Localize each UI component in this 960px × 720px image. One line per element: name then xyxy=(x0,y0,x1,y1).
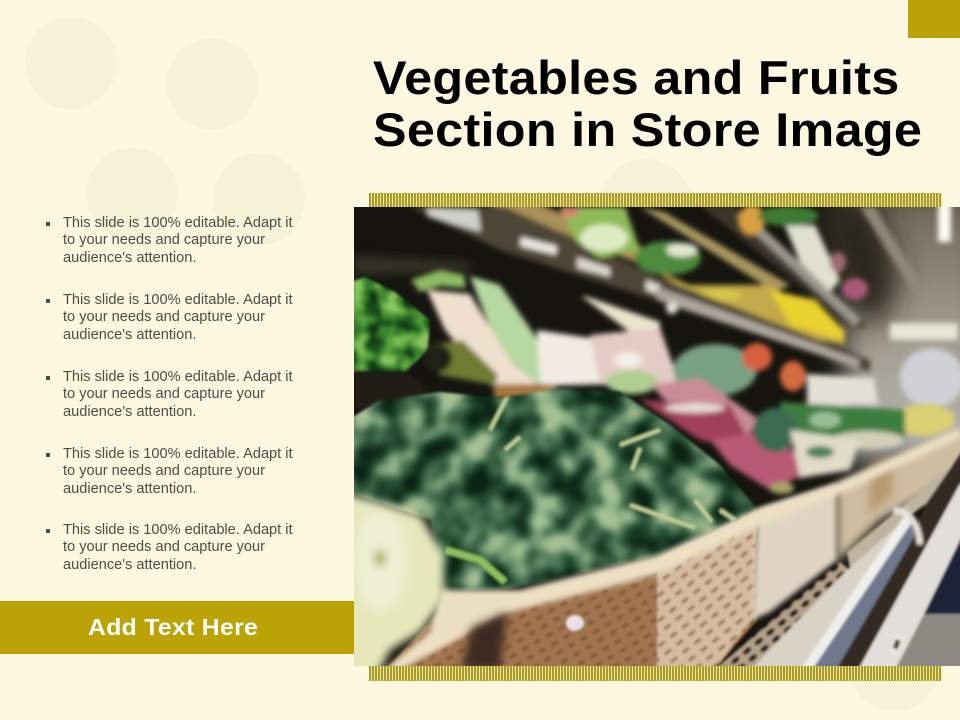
photo backdrop xyxy=(354,190,960,666)
background circle 1 xyxy=(25,17,117,109)
bullet 5: audience's attention. xyxy=(63,556,196,572)
background circle 5 xyxy=(600,159,692,251)
right blurred store background xyxy=(860,200,960,408)
pale lettuce foreground xyxy=(330,490,444,690)
shelf rail and lower fixtures xyxy=(714,440,960,670)
background circle 3 xyxy=(86,148,178,240)
bullet 3: to your needs and capture your xyxy=(63,386,265,402)
lettuce on left xyxy=(354,276,432,374)
bullet 3: audience's attention. xyxy=(63,404,196,420)
banner: add text here xyxy=(0,601,354,654)
bullet 5 xyxy=(46,522,293,572)
bullet 2: This slide is 100% editable. Adapt it xyxy=(63,292,293,308)
bullet 2: audience's attention. xyxy=(63,326,196,342)
bottom striped bar xyxy=(369,666,942,681)
corner accent block xyxy=(908,0,960,38)
bullet 4: to your needs and capture your xyxy=(63,463,265,479)
bullet 5: This slide is 100% editable. Adapt it xyxy=(63,522,293,538)
background circle 2 xyxy=(166,38,258,130)
top striped bar xyxy=(369,193,942,207)
background circle 6 xyxy=(848,619,940,711)
bullet 2: to your needs and capture your xyxy=(63,309,265,325)
bullet 3 xyxy=(46,368,293,420)
bullet 1: to your needs and capture your xyxy=(63,232,265,248)
bullet 2 xyxy=(46,292,293,342)
title xyxy=(373,51,922,156)
photo: vegetables and fruits on store shelves xyxy=(354,207,960,666)
bullet 3: This slide is 100% editable. Adapt it xyxy=(63,368,293,384)
title: Vegetables and Fruits xyxy=(373,51,900,104)
bullet 4 xyxy=(46,446,293,496)
bullet 1: audience's attention. xyxy=(63,250,196,266)
banner label: Add Text Here xyxy=(88,614,258,640)
bullet 4: This slide is 100% editable. Adapt it xyxy=(63,446,293,462)
pale cabbages and greens in middle row xyxy=(354,270,955,494)
bullet 4: audience's attention. xyxy=(63,480,196,496)
title: Section in Store Image xyxy=(373,103,922,156)
bullet 5: to your needs and capture your xyxy=(63,539,265,555)
bullet list xyxy=(46,214,293,572)
bullet 1 xyxy=(46,214,293,266)
spinach pile xyxy=(354,388,758,592)
background circle 4 xyxy=(213,153,305,245)
bullet 1: This slide is 100% editable. Adapt it xyxy=(63,214,293,230)
wicker basket xyxy=(385,425,960,670)
upper shelves with produce xyxy=(410,200,870,372)
